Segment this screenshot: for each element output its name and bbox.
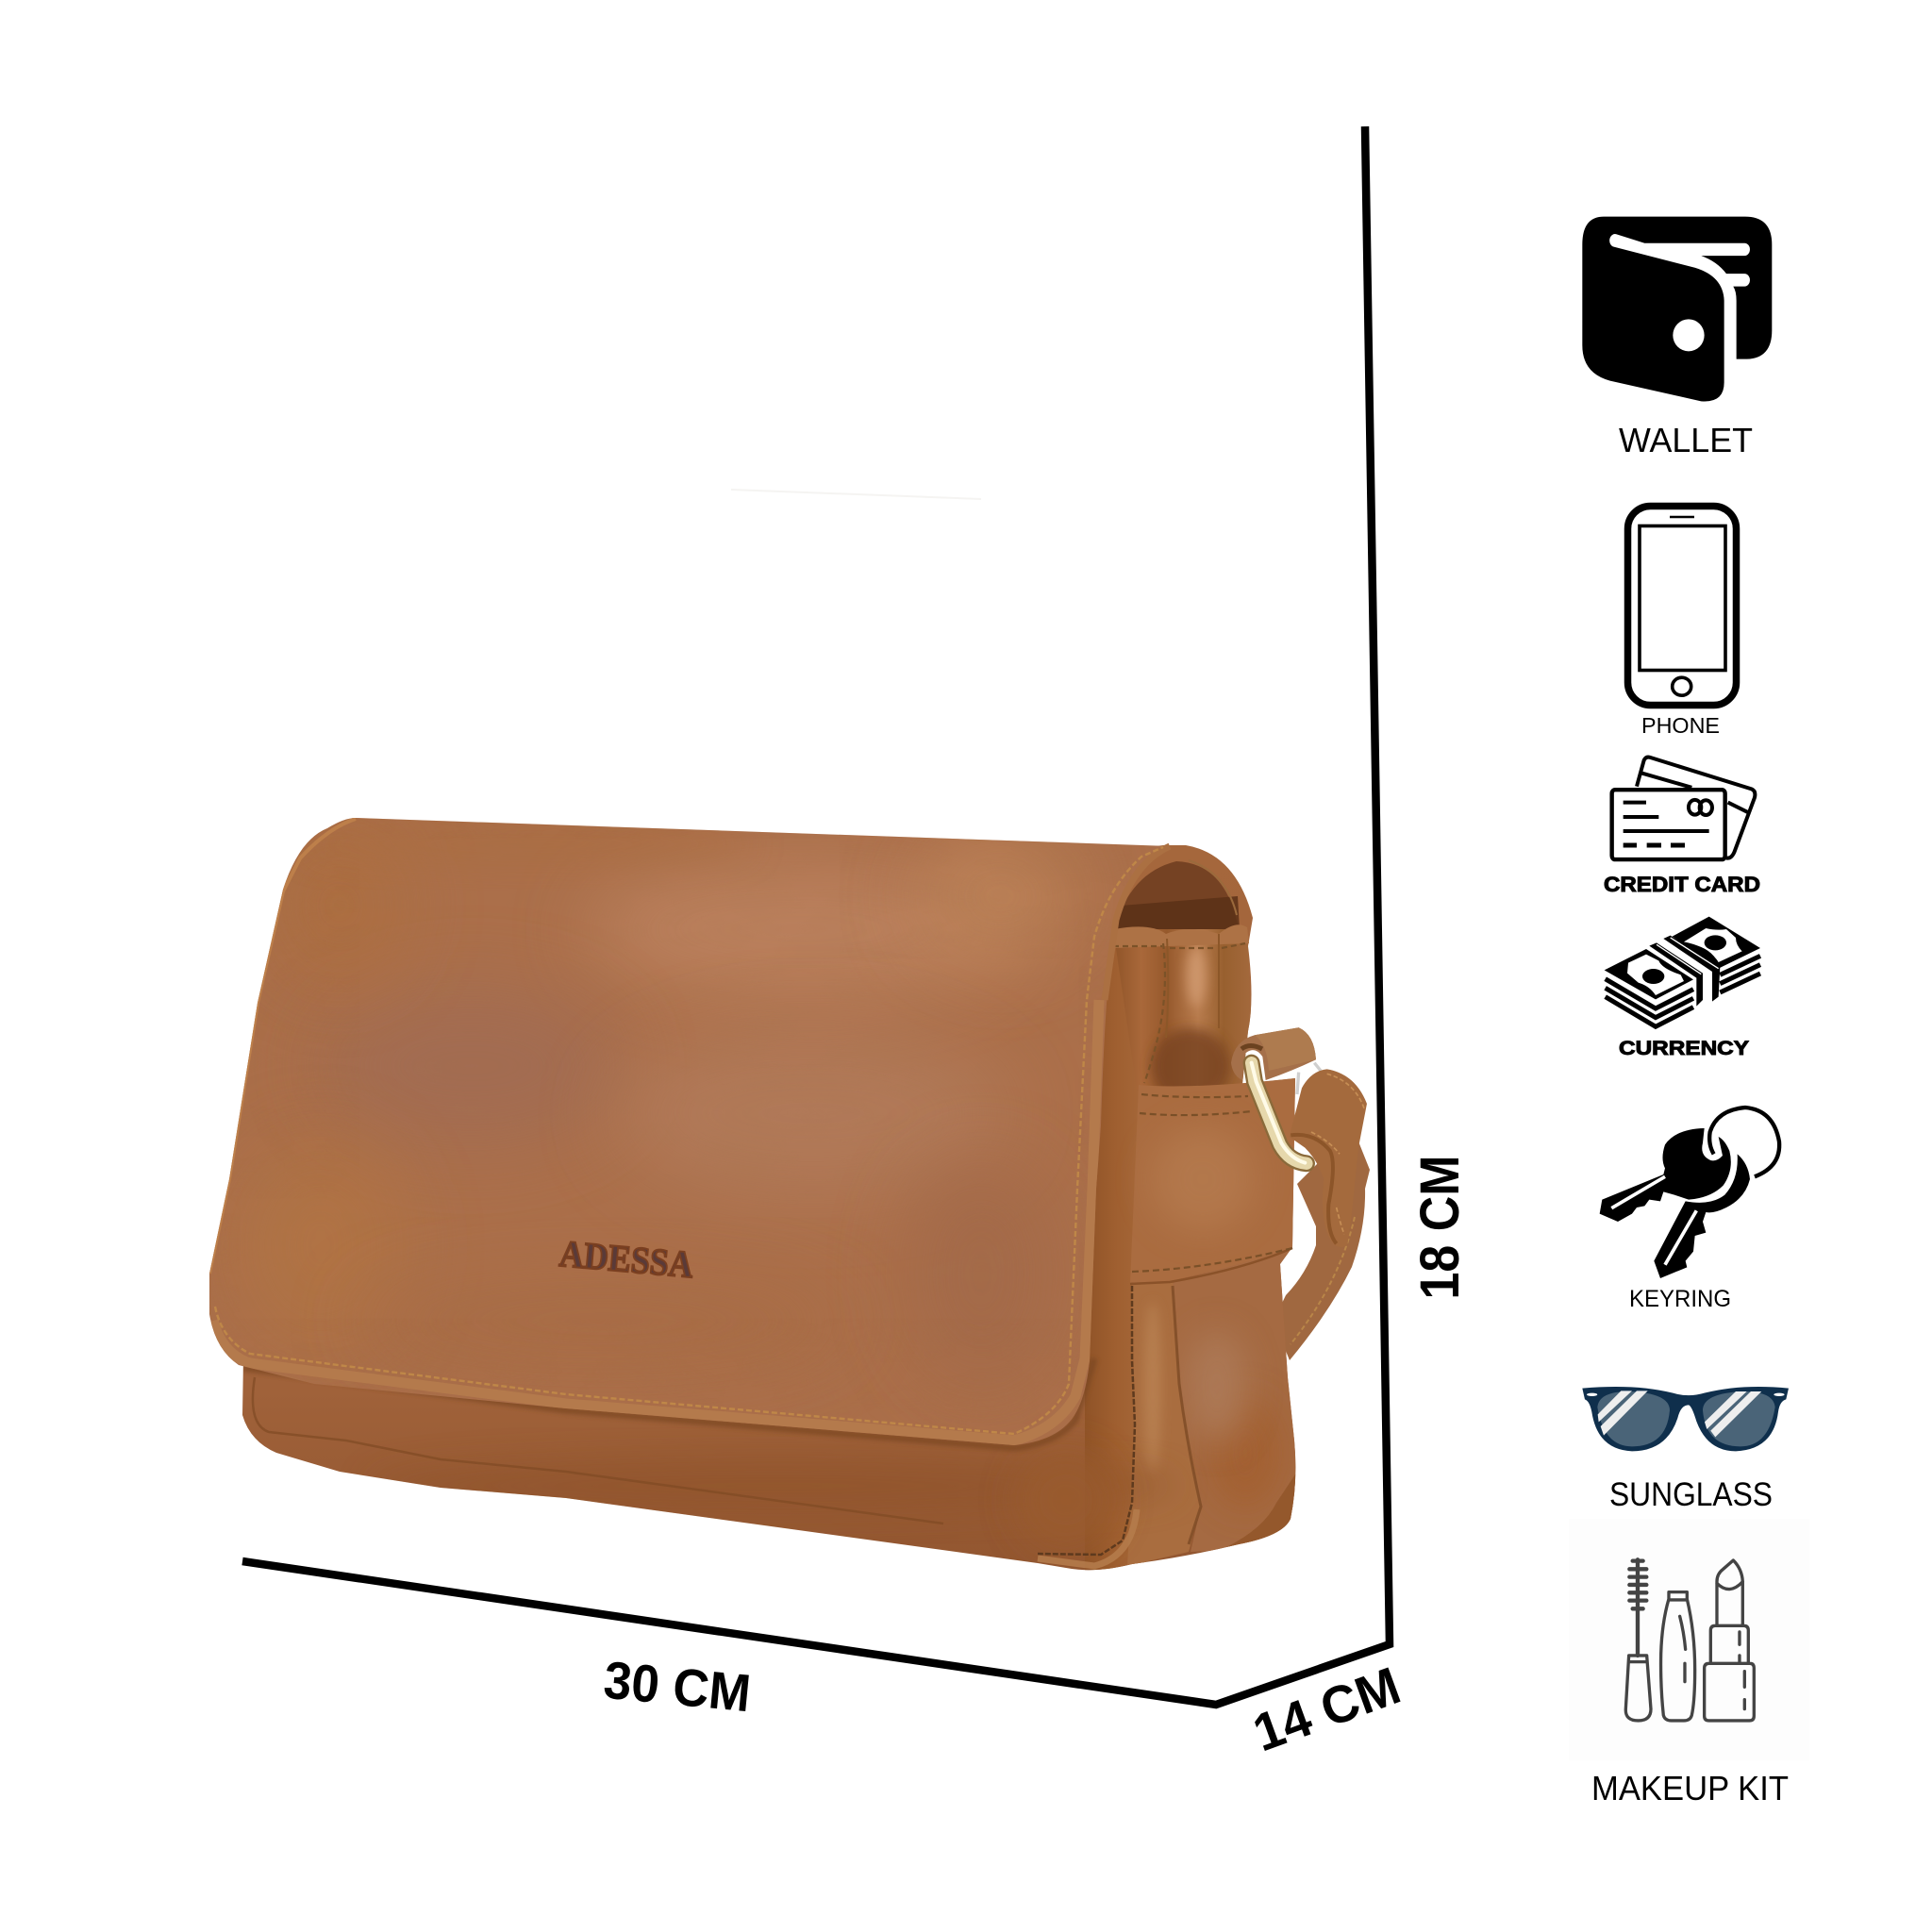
lower strap tab (1290, 1069, 1367, 1247)
band stitching (1132, 1094, 1292, 1272)
dimension: 14 CM: 14 CM (1245, 1656, 1407, 1762)
key ring (1709, 1108, 1779, 1176)
lipstick (1705, 1560, 1754, 1721)
dimension lines (242, 126, 1390, 1705)
shadow under flap (243, 1358, 1094, 1448)
lower front right (1085, 1477, 1087, 1515)
left banknote face (1627, 955, 1684, 995)
front card (1612, 790, 1725, 859)
label: phone: PHONE (1641, 713, 1720, 738)
mascara handle (1625, 1656, 1651, 1721)
label: currency: CURRENCY (1619, 1037, 1749, 1059)
icon: wallet (1582, 217, 1772, 401)
right banknote (1673, 917, 1760, 969)
shoulder strap (1274, 1141, 1370, 1360)
column light streak (1144, 1302, 1161, 1472)
panel: makeup background (1569, 1519, 1809, 1760)
flap (209, 818, 1170, 1445)
label: wallet: WALLET (1619, 421, 1753, 459)
side panel pale (1187, 1330, 1247, 1443)
lower side panel (1188, 1247, 1296, 1552)
metal ring (1252, 1063, 1307, 1163)
left banknote centre (1642, 969, 1664, 984)
right banknote crescent (1686, 943, 1717, 961)
band white gaps (1657, 938, 1719, 974)
back card (1637, 758, 1755, 858)
icon: currency (1605, 917, 1760, 1026)
gusset light (1187, 946, 1206, 1007)
right banknote centre (1705, 935, 1726, 950)
lower front darkening (379, 1477, 1135, 1524)
front panel stitch (1038, 1278, 1135, 1555)
side column (1085, 929, 1146, 1575)
upper leather loop (1231, 1027, 1321, 1094)
interior dark band (1114, 896, 1240, 929)
stacked bills right (1720, 956, 1760, 992)
side bottom fold (1226, 1472, 1297, 1547)
label: credit card: CREDIT CARD (1604, 873, 1760, 896)
back rim stitch (1189, 860, 1237, 915)
bag illustration (189, 802, 1370, 1575)
flap bottom rim (213, 1000, 1099, 1441)
gusset fold lines (1166, 934, 1219, 1038)
band edge dark (1130, 1248, 1292, 1284)
front key (1600, 1128, 1731, 1222)
key slits (1611, 1176, 1696, 1265)
rivets (1587, 1393, 1785, 1396)
card lines (1624, 803, 1709, 831)
side column below band (1127, 1278, 1201, 1566)
card logo (1689, 800, 1712, 815)
icon: phone (1628, 506, 1736, 706)
label: makeup kit: MAKEUP KIT (1591, 1769, 1789, 1807)
gusset stitching (1113, 943, 1245, 1083)
right banknote face (1684, 928, 1742, 962)
bottom rim (1038, 1509, 1137, 1566)
dimension: 30 CM: 30 CM (601, 1650, 754, 1723)
money band (1649, 936, 1720, 1007)
body shading (243, 929, 1297, 1575)
gusset tops (1114, 924, 1249, 948)
fold line (1173, 1286, 1201, 1544)
interior under flap (1114, 861, 1239, 929)
mascara wand (1629, 1559, 1646, 1656)
frame (1582, 1387, 1789, 1451)
icon: keys (1600, 1108, 1779, 1278)
flap leather mottling (189, 802, 1132, 1462)
dimension: 18 CM: 18 CM (1409, 1155, 1471, 1300)
faint mark (731, 490, 981, 499)
flap stitching (215, 847, 1163, 1434)
flap rim top arch (1105, 846, 1170, 1000)
icon: credit card (1612, 758, 1755, 859)
mascara tube (1661, 1592, 1695, 1721)
side panel patches (1208, 1396, 1283, 1509)
stacked bills left (1606, 979, 1693, 1026)
reflections (1598, 1391, 1761, 1437)
gusset dark bottom (1151, 1028, 1230, 1104)
left edge highlight (209, 819, 356, 1274)
band highlight (1151, 1127, 1255, 1231)
icon: makeup kit (1625, 1559, 1754, 1721)
label: sunglass: SUNGLASS (1609, 1476, 1773, 1513)
strap stitching (1291, 1217, 1355, 1344)
gussets (1113, 929, 1255, 1090)
brand logo ADESSA: ADESSA (558, 1232, 695, 1286)
back key (1654, 1154, 1750, 1278)
left banknote (1605, 949, 1693, 999)
label: keyring: KEYRING (1629, 1286, 1731, 1312)
side band (1130, 1078, 1295, 1283)
icon: sunglasses (1582, 1387, 1789, 1451)
bag body and side (242, 845, 1295, 1570)
ring top shadow (1241, 1045, 1262, 1049)
lenses (1597, 1391, 1775, 1446)
seam lines (253, 1377, 943, 1524)
